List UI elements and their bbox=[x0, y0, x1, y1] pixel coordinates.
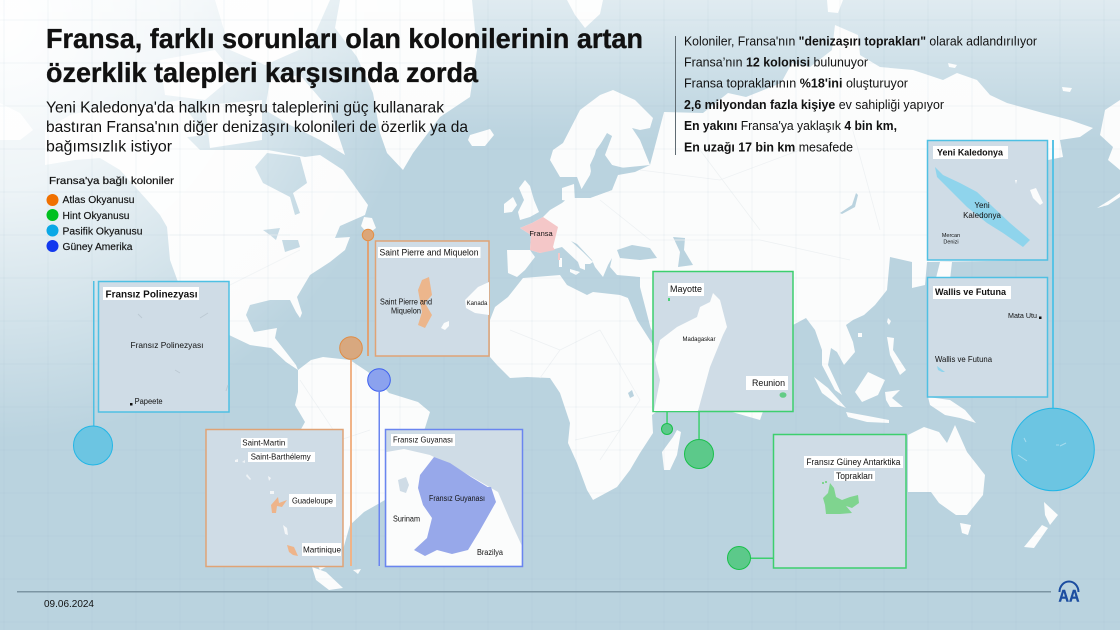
panel: New Caledonia bbox=[928, 140, 1048, 260]
panel: Caribbean islands: Saint-Barthélemy bbox=[251, 452, 311, 462]
title: özerklik talepleri karşısında zorda bbox=[46, 57, 478, 88]
panel: Caribbean islands: Martinique bbox=[303, 544, 341, 554]
date: 09.06.2024 bbox=[44, 599, 94, 610]
facts list: Fransa’nın 12 kolonisi bulunuyor bbox=[684, 56, 868, 70]
panel: Saint Pierre and Miquelon: Saint Pierre and bbox=[380, 298, 432, 306]
panel: Caribbean islands: Saint-Martin bbox=[242, 438, 286, 448]
facts list: En uzağı 17 bin km mesafede bbox=[684, 140, 853, 154]
panel: Wallis and Futuna: Wallis ve Futuna bbox=[935, 354, 992, 364]
panel: Mayotte and Reunion bbox=[653, 272, 793, 468]
legend bbox=[46, 175, 175, 253]
panel: Mayotte and Reunion: Reunion bbox=[752, 378, 785, 389]
panel: New Caledonia: Yeni bbox=[974, 201, 990, 210]
panel: Caribbean islands bbox=[206, 337, 362, 566]
panel: New Caledonia: Kaledonya bbox=[963, 211, 1001, 220]
panel: French Polynesia: Fransız Polinezyası bbox=[130, 340, 204, 350]
panel: Saint Pierre and Miquelon: Kanada bbox=[467, 301, 488, 307]
panel: French Southern and Antarctic Lands bbox=[728, 434, 906, 570]
subtitle text: Yeni Kaledonya'da halkın meşru taleplerini güç kullanarak bbox=[46, 100, 445, 116]
panel: Wallis and Futuna bbox=[928, 278, 1048, 397]
facts list: En yakını Fransa'ya yaklaşık 4 bin km, bbox=[684, 119, 897, 133]
panel: French Polynesia: Fransız Polinezyası bbox=[106, 289, 198, 300]
panel: Mayotte and Reunion: Mayotte bbox=[670, 284, 702, 294]
panel: Caribbean islands: Guadeloupe bbox=[292, 496, 333, 506]
legend: Güney Amerika bbox=[62, 242, 133, 253]
panel: New Caledonia: Yeni Kaledonya bbox=[937, 148, 1004, 158]
panel: New Caledonia: Mercan bbox=[942, 233, 960, 239]
panel: French Southern and Antarctic Lands: Fransız Güney Antarktika bbox=[806, 457, 900, 467]
panel: Saint Pierre and Miquelon: Saint Pierre and Miquelon bbox=[380, 248, 478, 258]
legend: Atlas Okyanusu bbox=[62, 195, 134, 206]
legend: Fransa'ya bağlı koloniler bbox=[49, 175, 175, 187]
panel: French Guiana: Fransız Guyanası bbox=[393, 435, 453, 445]
subtitle text: bastıran Fransa'nın diğer denizaşırı kolonileri de özerlik ya da bbox=[46, 119, 468, 136]
title: Fransa, farklı sorunları olan kolonilerinin artan bbox=[46, 23, 643, 54]
panel: Saint Pierre and Miquelon bbox=[362, 229, 489, 356]
panel: Mayotte and Reunion: Madagaskar bbox=[682, 336, 716, 343]
footer line bbox=[17, 591, 1051, 592]
facts list: Koloniler, Fransa'nın "denizaşırı toprakları" olarak adlandırılıyor bbox=[684, 35, 1037, 49]
legend: Hint Okyanusu bbox=[62, 211, 130, 222]
panel: Saint Pierre and Miquelon: Miquelon bbox=[391, 306, 421, 316]
subtitle text: bağımsızlık istiyor bbox=[46, 138, 173, 156]
AA logo: AA bbox=[1058, 586, 1080, 606]
panel: French Guiana: Fransız Guyanası bbox=[429, 494, 485, 503]
panel: French Polynesia: Papeete bbox=[135, 397, 163, 406]
panel: New Caledonia: Denizi bbox=[943, 240, 959, 246]
france highlight bbox=[520, 217, 560, 260]
facts list: Fransa topraklarının %18'ini oluşturuyor bbox=[684, 77, 908, 91]
panel: French Polynesia bbox=[74, 281, 229, 465]
panel: French Guiana bbox=[368, 369, 522, 566]
title bbox=[46, 23, 643, 88]
facts list bbox=[675, 35, 1037, 155]
france highlight: Fransa bbox=[529, 229, 553, 238]
panel: French Southern and Antarctic Lands: Toprakları bbox=[836, 471, 873, 481]
AA logo bbox=[1058, 582, 1080, 606]
subtitle text bbox=[46, 100, 468, 156]
panel: French Guiana: Brazilya bbox=[477, 548, 504, 557]
legend: Pasifik Okyanusu bbox=[62, 226, 142, 238]
panel: Wallis and Futuna: Mata Utu bbox=[1008, 311, 1037, 320]
pacific connector and circle bbox=[1012, 140, 1094, 491]
panel: French Guiana: Surinam bbox=[393, 515, 420, 524]
panel: Wallis and Futuna: Wallis ve Futuna bbox=[935, 287, 1007, 298]
facts list: 2,6 milyondan fazla kişiye ev sahipliği yapıyor bbox=[684, 98, 944, 112]
